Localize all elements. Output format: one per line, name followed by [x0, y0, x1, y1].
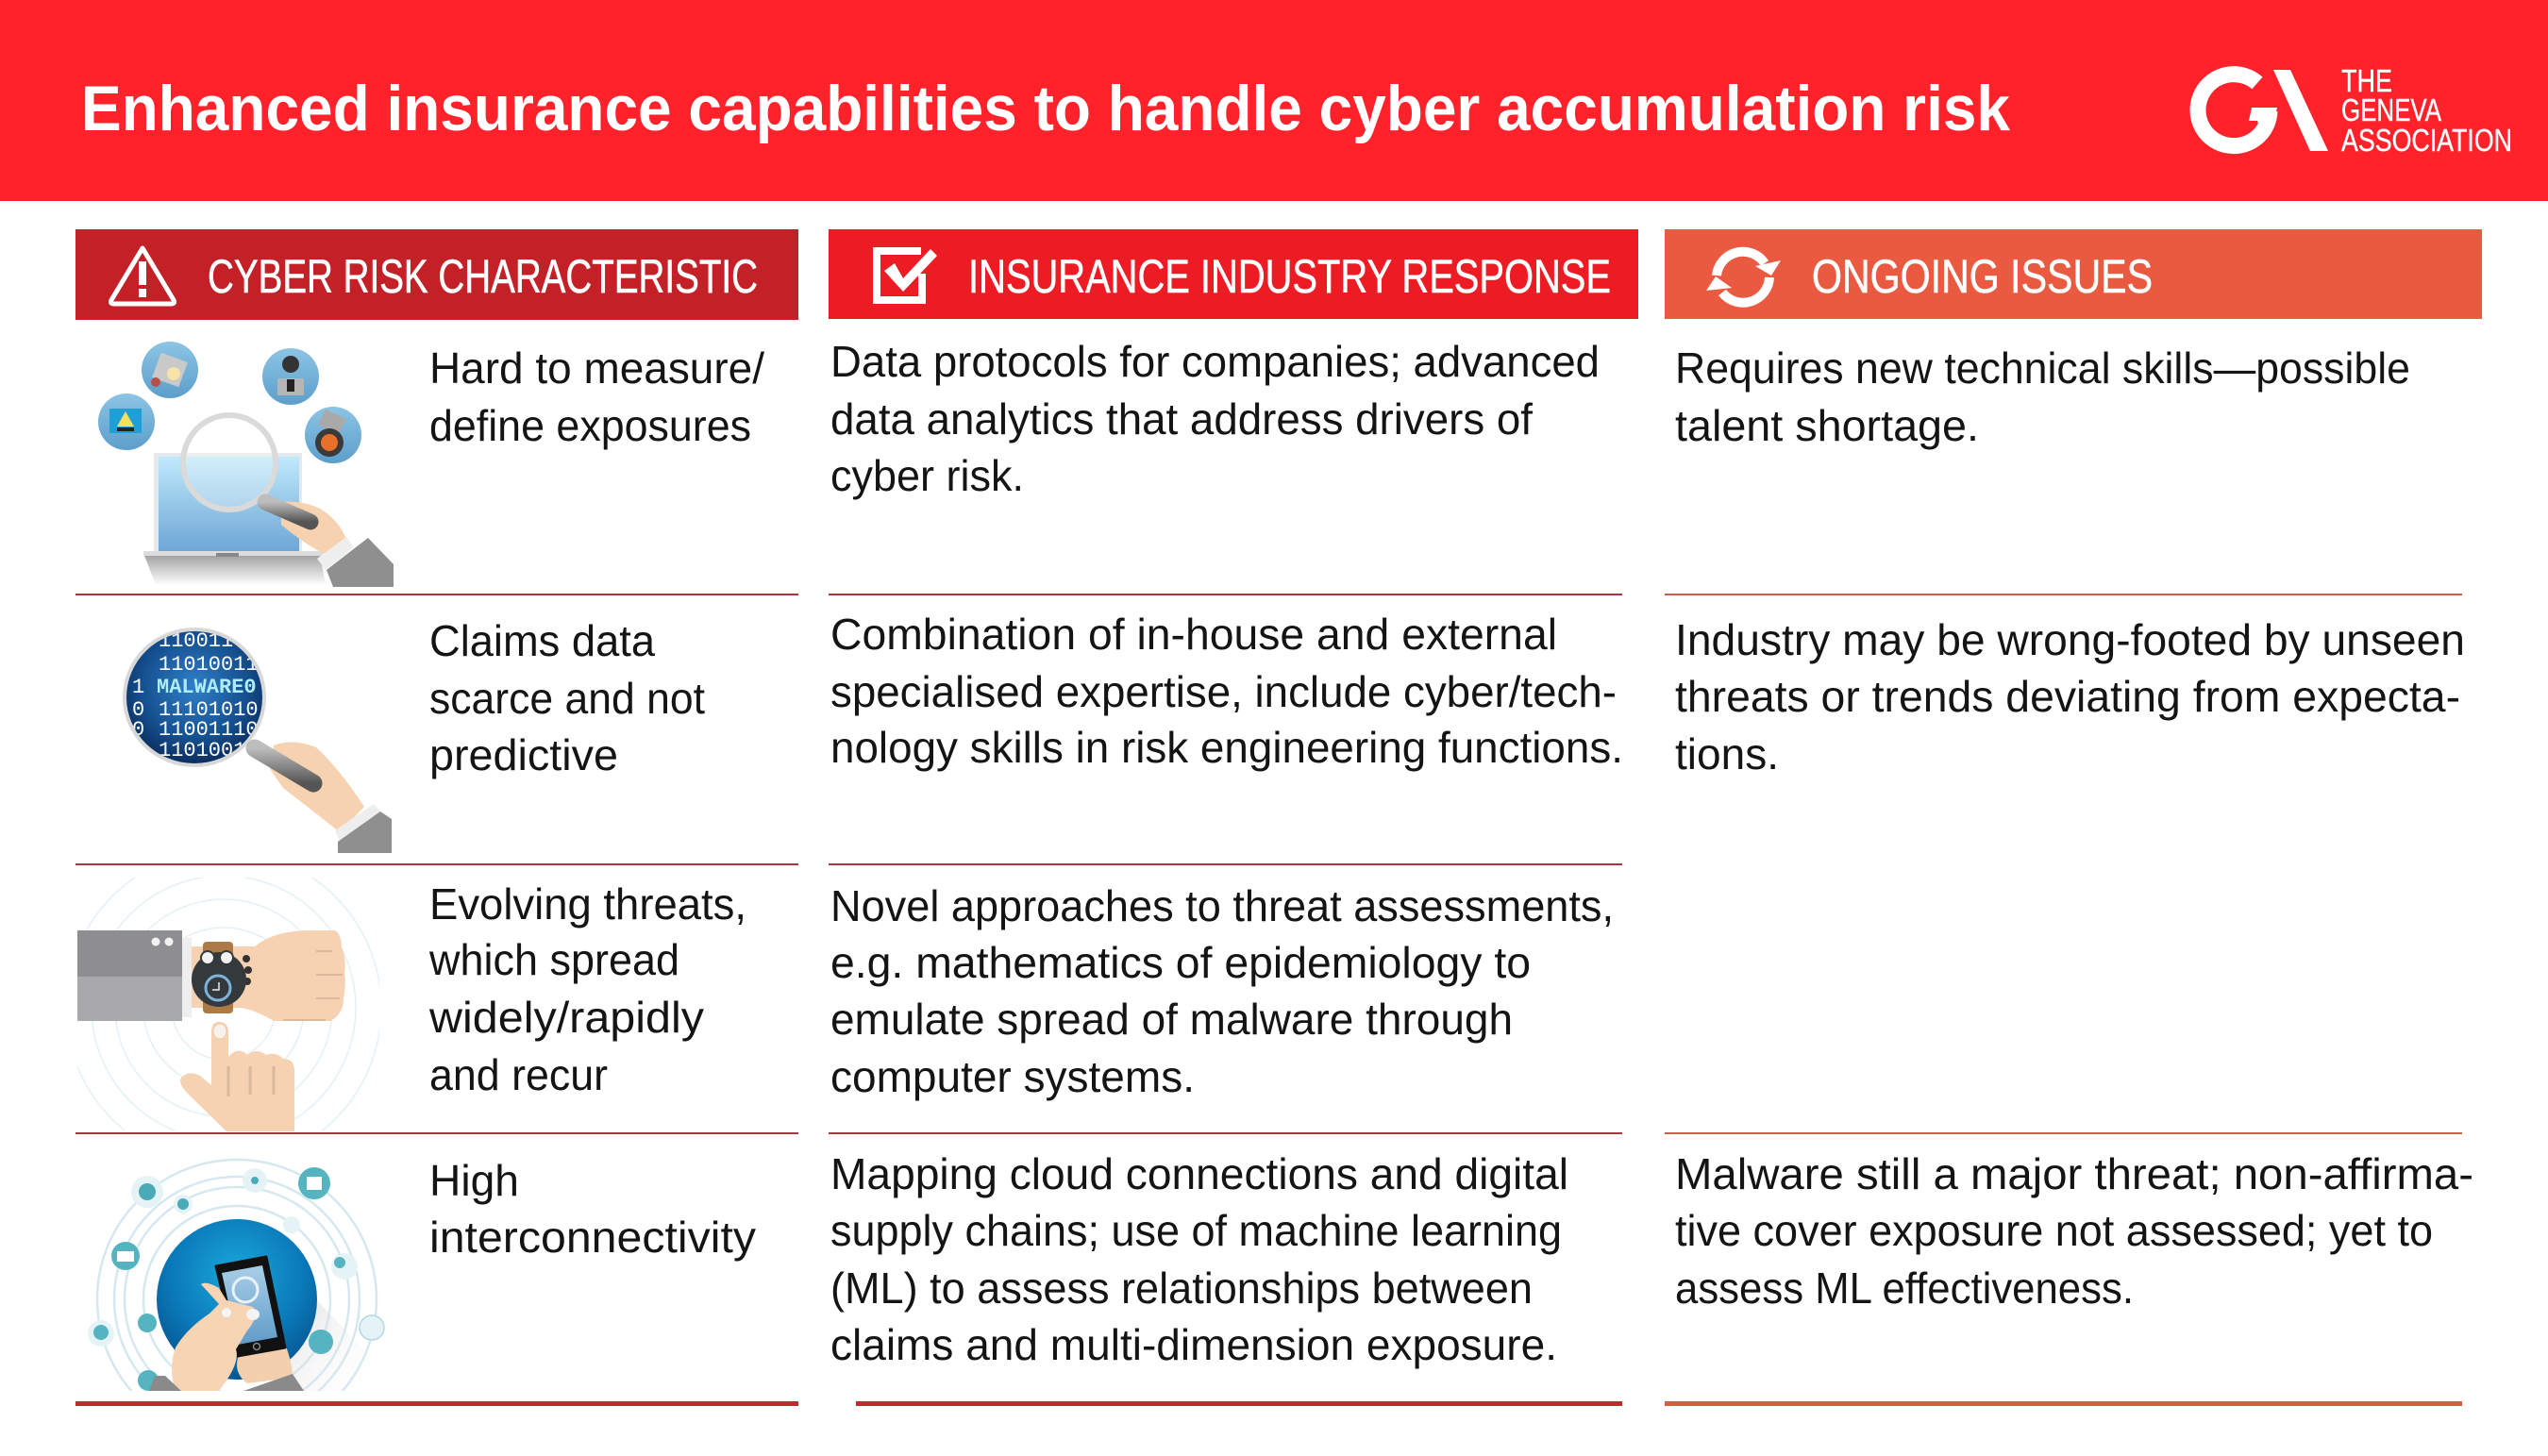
logo: The Geneva Association	[2198, 63, 2512, 158]
text: mapping cloud connections: Mapping cloud connections and digital	[830, 1149, 1568, 1198]
text: hard to measure: Hard to measure/	[429, 343, 764, 393]
text: new technical skills: Requires new technical skills—possible	[1675, 343, 2410, 393]
text: novel approaches: Novel approaches to threat assessments,	[830, 881, 1614, 930]
panel: cyber risk characteristic	[66, 229, 798, 1439]
text: combination of expertise: Combination of in-house and external	[830, 610, 1557, 659]
text: combination of expertise: nology skills in risk engineering functions.	[830, 723, 1623, 772]
text: data protocols: data analytics that address drivers of	[830, 394, 1533, 443]
column heading: ongoing issues: ONGOING ISSUES	[1812, 250, 2153, 303]
text: wrong-footed by unseen threats: threats or trends deviating from expecta-	[1675, 672, 2460, 721]
text: data protocols: cyber risk.	[830, 451, 1024, 500]
text: new technical skills: talent shortage.	[1675, 401, 1979, 450]
icon: refresh arrows	[1706, 252, 1781, 303]
text: new technical skills	[1675, 343, 2410, 450]
illustration: magnifier over malware code: 0	[132, 698, 144, 722]
column heading: insurance industry response: INSURANCE INDUSTRY RESPONSE	[968, 250, 1611, 303]
text: mapping cloud connections	[830, 1149, 1568, 1369]
panel: insurance industry response	[829, 229, 1638, 1406]
text: novel approaches: computer systems.	[830, 1052, 1195, 1101]
text: malware still a major threat: tive cover exposure not assessed; yet to	[1675, 1206, 2433, 1255]
illustration: globe with smartphone and connected icons	[88, 1159, 385, 1391]
text: data protocols: Data protocols for companies; advanced	[830, 337, 1600, 386]
text: evolving threats: and recur	[429, 1050, 608, 1099]
illustration: smart watch on wrist	[77, 878, 379, 1131]
illustration: magnifier over malware code: 11101010	[159, 698, 259, 722]
text: data protocols	[830, 337, 1600, 500]
illustration: magnifier over malware code: 1	[132, 676, 144, 699]
text: wrong-footed by unseen threats: Industry may be wrong-footed by unseen	[1675, 615, 2465, 664]
text: novel approaches	[830, 881, 1614, 1101]
text: wrong-footed by unseen threats: tions.	[1675, 729, 1779, 778]
text: malware still a major threat	[1675, 1149, 2473, 1313]
text: evolving threats: widely/rapidly	[428, 993, 704, 1042]
icon: checkbox	[877, 249, 937, 300]
text: evolving threats: Evolving threats,	[429, 879, 746, 929]
icon: warning triangle	[110, 248, 175, 304]
text: claims data: Claims data	[429, 616, 655, 665]
text: high interconnectivity: interconnectivity	[429, 1213, 756, 1262]
text: claims data: predictive	[429, 730, 618, 779]
text: malware still a major threat: Malware still a major threat; non-affirma-	[1675, 1149, 2473, 1198]
text: claims data: scarce and not	[429, 674, 705, 723]
text: mapping cloud connections: supply chains; use of machine learning	[830, 1206, 1562, 1255]
text: hard to measure	[429, 343, 764, 450]
text: combination of expertise	[830, 610, 1623, 772]
column heading: cyber risk characteristic: CYBER RISK CHARACTERISTIC	[208, 250, 758, 303]
illustration: laptop under magnifier with threat bubbles	[98, 342, 394, 587]
text: wrong-footed by unseen threats	[1675, 615, 2465, 778]
panel: ongoing issues	[1665, 229, 2482, 1406]
title: Enhanced insurance capabilities to handle cyber accumulation risk	[81, 73, 2010, 144]
text: novel approaches: e.g. mathematics of epidemiology to	[830, 938, 1531, 987]
text: evolving threats: which spread	[428, 935, 679, 984]
illustration: magnifier over malware code: 1100110	[159, 629, 245, 653]
illustration: magnifier over malware code	[123, 628, 392, 853]
logo: The Geneva Association: GENEVA	[2341, 92, 2441, 127]
text: hard to measure: define exposures	[429, 401, 751, 450]
illustration: magnifier over malware code: MALWARE0	[157, 676, 257, 699]
illustration: magnifier over malware code: 1101001	[159, 739, 245, 762]
text: mapping cloud connections: claims and multi-dimension exposure.	[830, 1320, 1557, 1369]
column heading: insurance industry response	[829, 229, 1638, 319]
text: high interconnectivity: High	[429, 1156, 519, 1205]
text: novel approaches: emulate spread of malware through	[830, 995, 1513, 1044]
text: evolving threats	[428, 879, 746, 1099]
text: claims data	[429, 616, 705, 779]
logo: The Geneva Association: ASSOCIATION	[2341, 123, 2512, 158]
text: mapping cloud connections: (ML) to assess relationships between	[830, 1264, 1533, 1313]
illustration: magnifier over malware code: 0	[132, 718, 144, 742]
illustration: magnifier over malware code: 11001110	[159, 718, 259, 742]
text: combination of expertise: specialised expertise, include cyber/tech-	[830, 667, 1617, 716]
column heading: cyber risk characteristic	[75, 229, 798, 320]
logo: The Geneva Association: THE	[2341, 63, 2392, 98]
illustration: magnifier over malware code: 11010011	[159, 653, 259, 677]
text: malware still a major threat: assess ML effectiveness.	[1675, 1264, 2134, 1313]
column heading: ongoing issues	[1665, 229, 2482, 319]
header banner	[0, 0, 2548, 201]
text: high interconnectivity	[429, 1156, 756, 1262]
